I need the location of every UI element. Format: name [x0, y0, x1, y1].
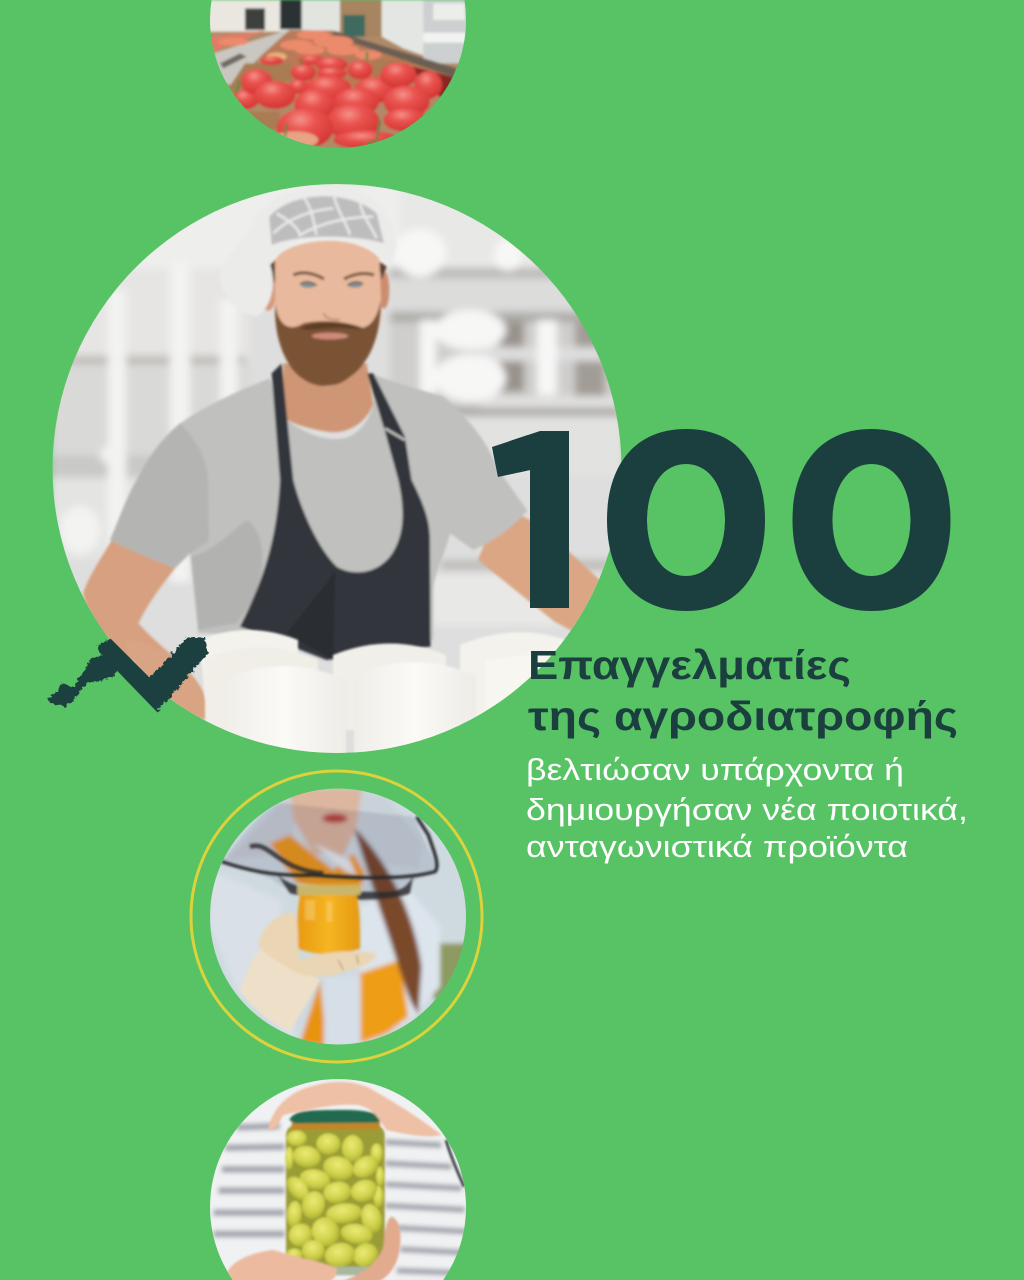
man: hand — [132, 658, 206, 720]
description text — [526, 752, 968, 864]
heading: Επαγγελματίες — [528, 642, 851, 688]
heading: της αγροδιατροφής — [528, 693, 958, 739]
beard — [275, 300, 381, 386]
veil — [222, 803, 437, 901]
jar — [297, 895, 360, 955]
man: head — [249, 184, 391, 388]
top hand — [268, 1082, 442, 1136]
description text: ανταγωνιστικά προϊόντα — [526, 829, 908, 864]
lid — [289, 1110, 383, 1123]
hairnet — [249, 184, 334, 316]
photo: hands holding olive jar — [207, 1077, 473, 1280]
cheese rounds — [200, 630, 566, 760]
arms — [83, 540, 177, 660]
jar body — [286, 1125, 385, 1273]
photo: cheesemaker with apron — [50, 180, 625, 760]
description text: δημιουργήσαν νέα ποιοτικά, — [526, 792, 968, 827]
photo: beekeeper holding honey jar — [207, 787, 470, 1050]
digit 0: 0 — [786, 381, 961, 661]
number: 100 — [492, 429, 950, 611]
man: torso — [83, 363, 600, 660]
bottom hand — [227, 1250, 337, 1280]
back tomatoes — [218, 30, 382, 61]
heading — [528, 642, 958, 739]
description text: βελτιώσαν υπάρχοντα ή — [526, 752, 904, 787]
apron — [240, 363, 431, 660]
digit 0: 0 — [600, 381, 775, 661]
sleeve and glove arm — [240, 949, 320, 1032]
glove — [258, 913, 376, 977]
neck — [283, 363, 373, 432]
eyes — [301, 282, 316, 288]
sleeve strap — [446, 1140, 464, 1187]
icon: brush check mark — [48, 637, 208, 712]
photo: tomato production line — [210, 0, 466, 148]
tomatoes — [231, 55, 442, 149]
digit 1: 1 — [452, 381, 611, 660]
dairy shelving background — [50, 180, 625, 760]
ring around honey photo — [191, 771, 482, 1062]
t-shirt — [180, 374, 528, 642]
